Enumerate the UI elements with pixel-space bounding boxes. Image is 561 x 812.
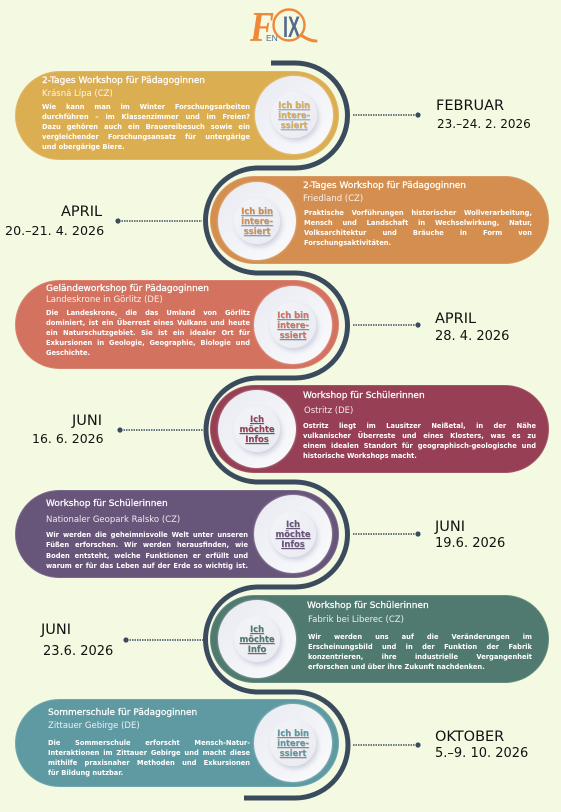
day: 23.–24. 2. 2026 <box>437 117 531 131</box>
month: OKTOBER <box>435 729 504 745</box>
month: JUNI <box>72 413 102 429</box>
day: 19.6. 2026 <box>435 536 505 551</box>
location: Nationaler Geopark Ralsko (CZ) <box>46 515 180 525</box>
button: Ich möchte Infos: möchte <box>239 424 275 434</box>
description: Die Landeskrone, die das Umland von Görlitz <box>46 309 250 317</box>
description: und obergärige Biere. <box>42 143 125 151</box>
panel: workshop Ostritz <box>210 385 549 473</box>
button: Ich bin interessiert <box>218 182 296 260</box>
button: Ich möchte Infos: Ich <box>250 414 264 424</box>
description: Boden entsteht, welche Funktionen er erfüllt und <box>46 552 248 560</box>
date connector <box>117 427 202 433</box>
location: Ostritz (DE) <box>304 406 353 416</box>
location: Zittauer Gebirge (DE) <box>48 721 140 731</box>
description: Wir werden die geheimnisvolle Welt unter unseren <box>46 531 248 539</box>
button: Ich möchte Info: Info <box>248 644 266 654</box>
button: Ich möchte Infos: Infos <box>281 539 305 549</box>
description: Dazu gehören auch ein Brauereibesuch sowie ein <box>42 123 250 131</box>
day: 5.–9. 10. 2026 <box>435 746 528 761</box>
button: Ich bin interessiert <box>255 76 333 154</box>
date connector <box>353 531 421 537</box>
button: Ich bin interessiert: Ich bin <box>277 310 309 320</box>
button: Ich bin interessiert: Ich bin <box>241 206 273 216</box>
description <box>304 209 532 247</box>
heading: 2-Tages Workshop für Pädagoginnen <box>303 181 466 191</box>
description <box>48 739 250 777</box>
description: mithilfe praxisnaher Methoden und Exkursionen <box>48 759 250 767</box>
description: erforschen und über ihre Zukunft nachdenken. <box>308 663 485 671</box>
button: Ich bin interessiert: ssiert <box>280 330 306 340</box>
description: Interaktionen im Zittauer Gebirge und macht diese <box>48 749 250 757</box>
heading: Sommerschule für Pädagoginnen <box>48 708 197 718</box>
date connector <box>353 322 421 328</box>
button: Ich bin interessiert: ssiert <box>244 226 270 236</box>
description: Ostritz liegt im Lausitzer Neißetal, in der Nähe <box>303 422 536 430</box>
button: Ich bin interessiert: intere- <box>241 216 273 226</box>
day: 23.6. 2026 <box>43 644 113 659</box>
description: Geschichte. <box>46 349 90 357</box>
heading: Workshop für Schülerinnen <box>46 499 168 509</box>
date connector <box>115 218 202 224</box>
button: Ich bin interessiert <box>254 286 332 364</box>
button: Ich bin interessiert: intere- <box>277 320 309 330</box>
button: Ich bin interessiert <box>254 704 332 782</box>
description <box>303 422 536 460</box>
month: JUNI <box>41 622 71 638</box>
month: FEBRUAR <box>436 98 504 114</box>
button: Ich möchte Infos: Ich <box>286 519 300 529</box>
description: ein Naturschutzgebiet. Sie ist ein idealer Ort für <box>46 329 250 337</box>
description: einem idealen Standort für geographisch-geologische und <box>303 442 536 450</box>
day: 20.–21. 4. 2026 <box>5 223 104 238</box>
button: Ich möchte Info <box>218 600 296 678</box>
month: JUNI <box>435 519 465 535</box>
heading: Workshop für Schülerinnen <box>303 391 425 401</box>
description <box>308 633 532 671</box>
description: durchführen – im Klassenzimmer und im Freien? <box>42 113 250 121</box>
heading: 2-Tages Workshop für Pädagoginnen <box>42 76 205 86</box>
button: Ich möchte Infos: möchte <box>275 529 311 539</box>
description: vulkanischer Überreste und eines Klosters, was es zu <box>303 432 536 440</box>
description: Exkursionen in Geologie, Geographie, Biologie und <box>46 339 250 347</box>
description <box>42 103 250 151</box>
button: Ich bin interessiert: ssiert <box>280 748 306 758</box>
description: Volksarchitektur und Bräuche in Form von <box>304 229 532 237</box>
description <box>46 309 250 357</box>
description: Forschungsaktivitäten. <box>304 239 391 247</box>
description: Erscheinungsbild und in der Funktion der Fabrik <box>308 643 532 651</box>
location: Fabrik bei Liberec (CZ) <box>308 615 404 625</box>
date: Oktober <box>353 729 528 761</box>
heading: Geländeworkshop für Pädagoginnen <box>46 284 209 294</box>
panel: workshop Ralsko <box>15 490 339 578</box>
button: Ich möchte Infos: Infos <box>245 434 269 444</box>
description: vergleichender Forschungsansatz für untergärige <box>42 133 250 141</box>
description: Wir werden uns auf die Veränderungen im <box>308 633 532 641</box>
description: Füßen erforschen. Wir werden herausfinden, wie <box>46 541 248 549</box>
description: historische Workshops macht. <box>303 452 417 460</box>
button: Ich bin interessiert: Ich bin <box>278 100 310 110</box>
logo: FENIX: IX <box>283 11 300 44</box>
description: warum er für das Leben auf der Erde so wichtig ist. <box>46 562 248 570</box>
panel: workshop Landeskrone <box>15 280 339 369</box>
month: APRIL <box>61 204 102 220</box>
date: Februar <box>353 98 531 131</box>
button: Ich bin interessiert: ssiert <box>281 120 307 130</box>
button: Ich möchte Info: möchte <box>239 634 275 644</box>
description: dominiert, ist ein Überrest eines Vulkans und heute <box>46 319 250 327</box>
location: Landeskrone in Görlitz (DE) <box>46 295 163 305</box>
date connector <box>353 742 421 748</box>
date: Juni 19 <box>353 519 505 551</box>
location: Friedland (CZ) <box>303 194 363 204</box>
date connector <box>123 637 204 643</box>
day: 16. 6. 2026 <box>32 431 104 446</box>
panel: Sommerschule Zittauer Gebirge <box>15 699 339 787</box>
button: Ich möchte Info: Ich <box>250 624 264 634</box>
date: April 28 <box>353 311 509 344</box>
description <box>46 531 248 570</box>
description: konzentrieren, ihre industrielle Vergangenheit <box>308 653 532 661</box>
button: Ich möchte Infos <box>254 495 332 573</box>
description: Mensch und Landschaft in Wechselwirkung, Natur, <box>304 219 532 227</box>
date: Juni 16 <box>32 413 202 446</box>
panel: workshop Krásná Lípa <box>15 71 339 160</box>
date connector <box>353 112 421 118</box>
description: Praktische Vorführungen historischer Wollverarbeitung, <box>304 209 532 217</box>
logo: FENIX: EN <box>266 33 278 43</box>
date: Juni 23 <box>40 622 204 659</box>
day: 28. 4. 2026 <box>435 329 509 344</box>
button: Ich bin interessiert: Ich bin <box>277 728 309 738</box>
description: Wie kann man im Winter Forschungsarbeiten <box>42 103 250 111</box>
panel: workshop Friedland <box>210 176 549 264</box>
logo: FENIX <box>249 5 318 47</box>
description: für Bildung nutzbar. <box>48 769 123 777</box>
date: April 20 <box>5 204 202 238</box>
button: Ich bin interessiert: intere- <box>278 110 310 120</box>
heading: Workshop für Schülerinnen <box>307 601 429 611</box>
month: APRIL <box>435 311 476 327</box>
location: Krásná Lípa (CZ) <box>42 89 113 99</box>
button: Ich bin interessiert: intere- <box>277 738 309 748</box>
panel: workshop Liberec <box>210 595 549 683</box>
button: Ich möchte Infos <box>218 390 296 468</box>
description: Die Sommerschule erforscht Mensch-Natur- <box>48 739 250 747</box>
